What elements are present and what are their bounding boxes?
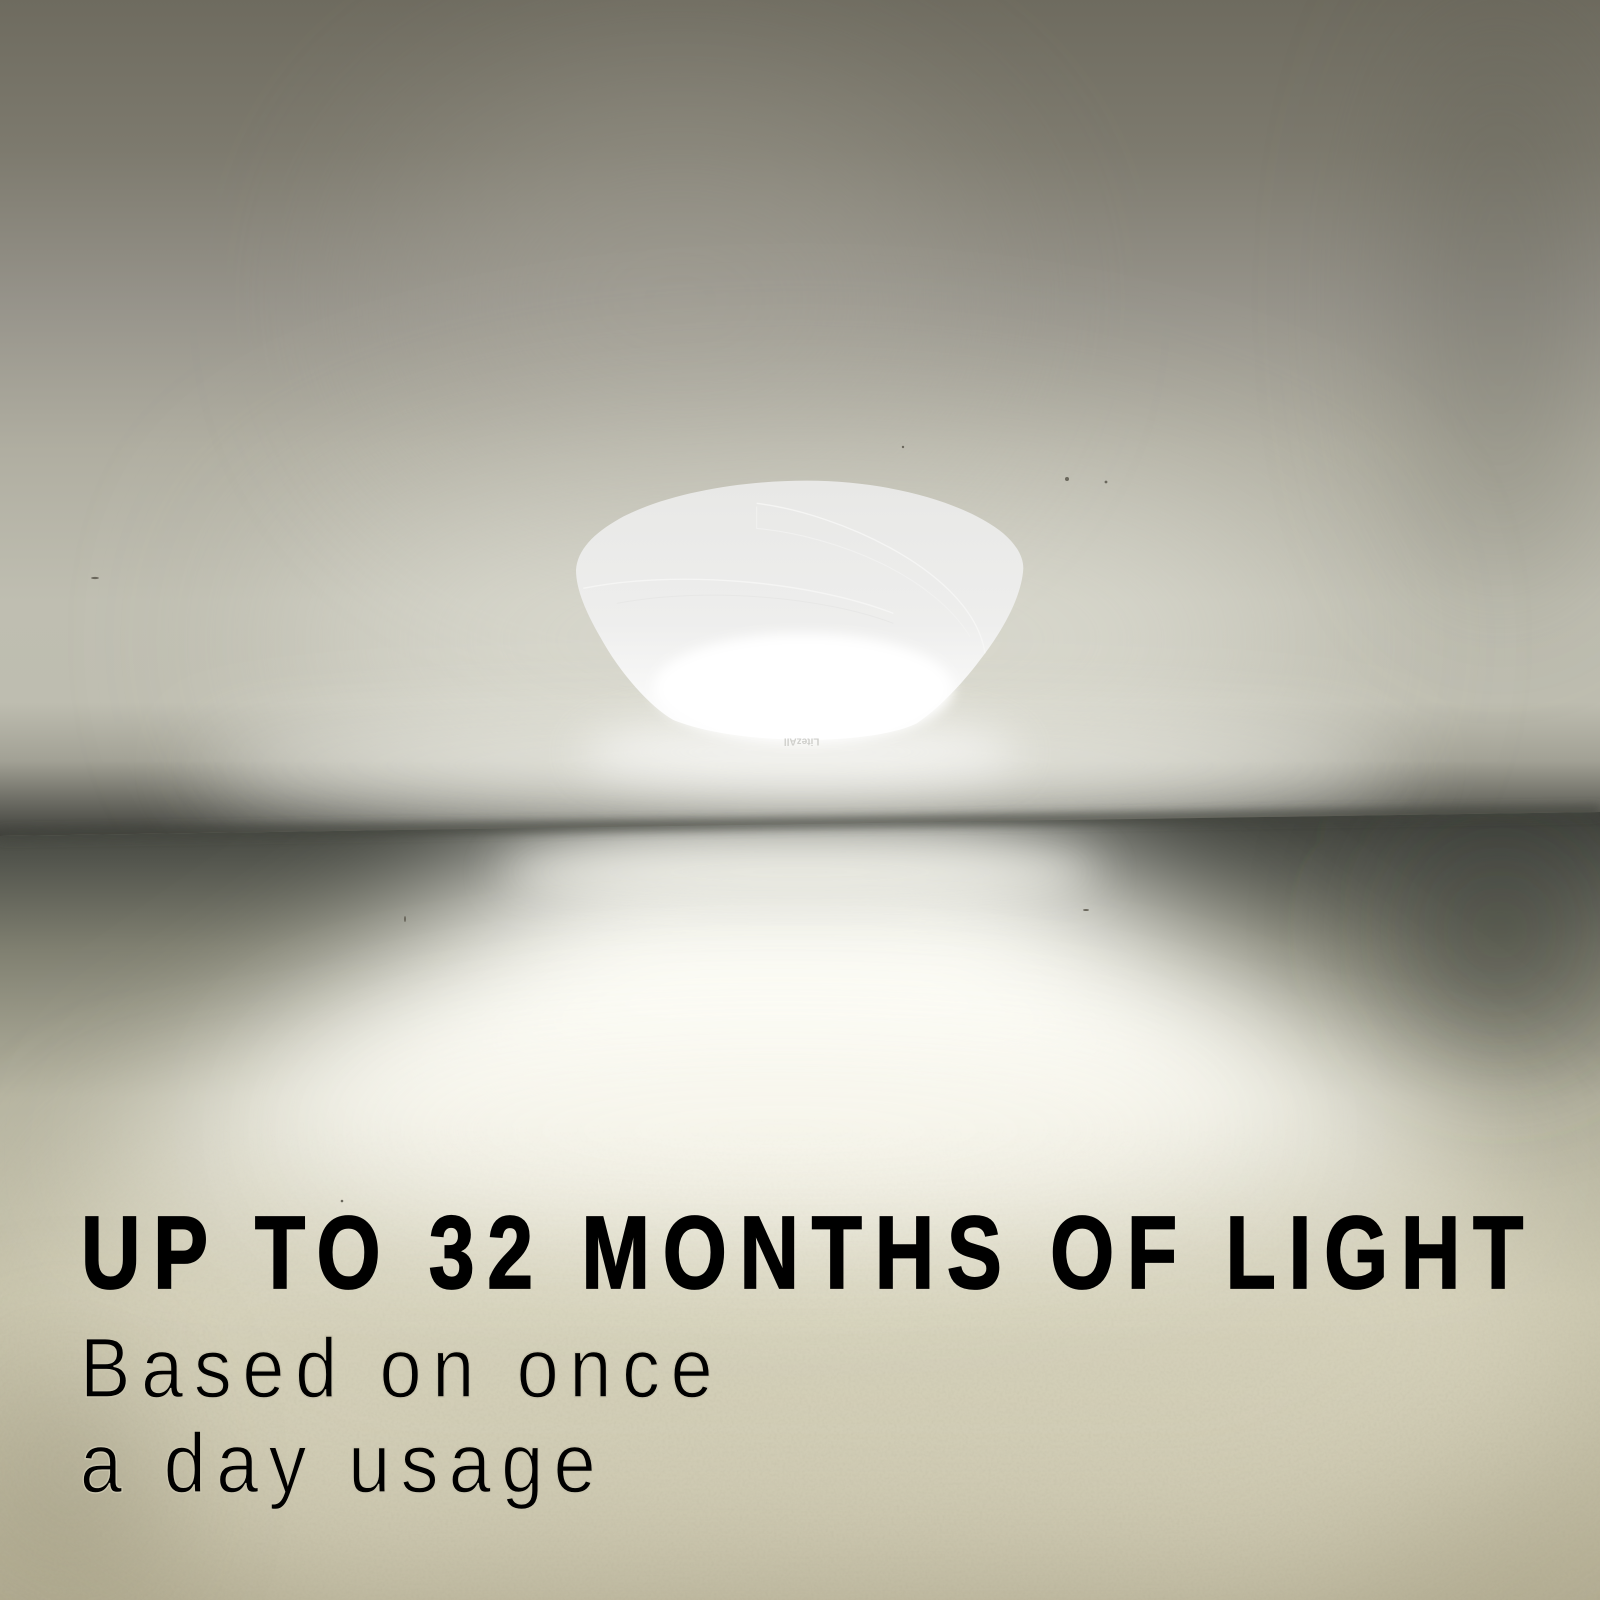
second line: a day usage (80, 1416, 596, 1510)
subheading (80, 1321, 713, 1510)
lit bottom glow (653, 633, 953, 743)
shade contour lines (583, 503, 985, 653)
first line: Based on once (80, 1321, 713, 1415)
maker mark seen upside down: LitezAll (784, 736, 819, 747)
wall texture (0, 1100, 1600, 1600)
lamp halo on ceiling (580, 716, 1020, 788)
shadow line where ceiling meets wall (0, 811, 1600, 835)
ceiling surface (0, 0, 1600, 836)
specks on surfaces (91, 446, 1107, 1202)
wall surface (0, 812, 1600, 1600)
lamp shade (576, 481, 1023, 740)
icon: dome ceiling lamp (576, 481, 1023, 747)
headline: UP TO 32 MONTHS OF LIGHT (81, 1195, 1523, 1310)
